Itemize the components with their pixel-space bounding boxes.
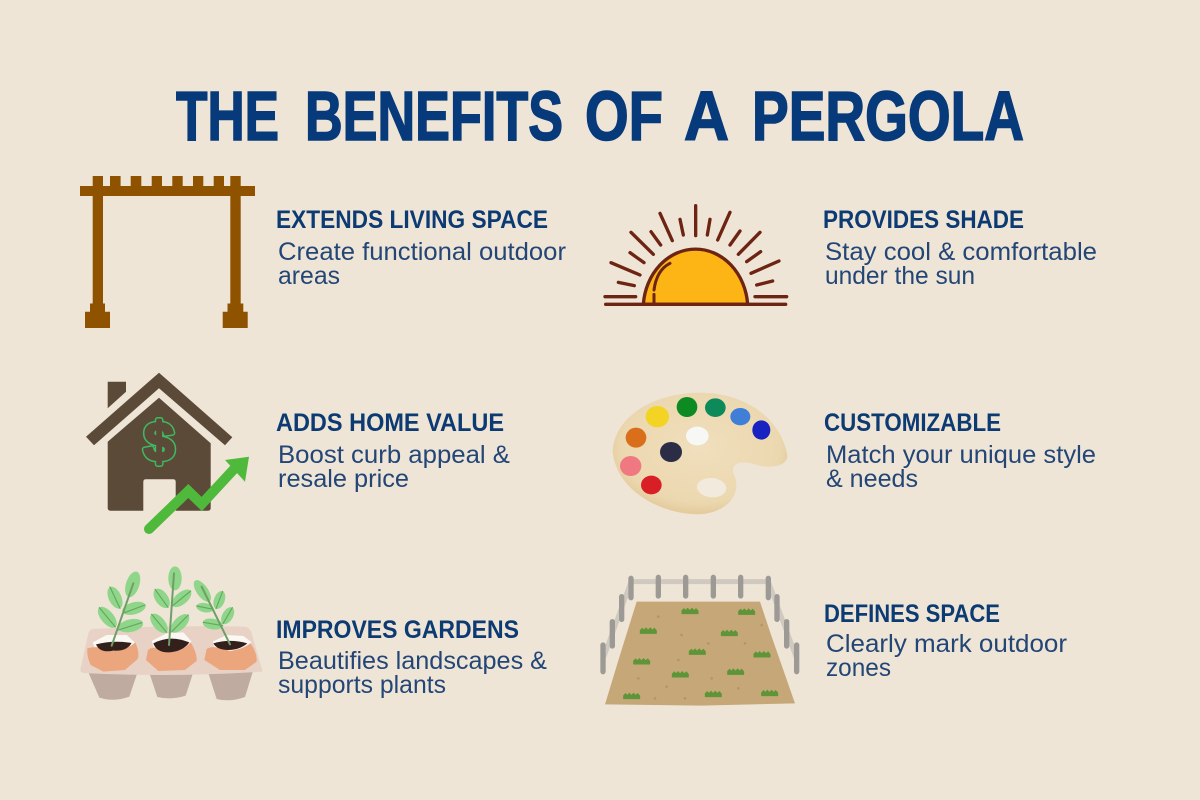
text block: customizable: CUSTOMIZABLE <box>824 409 1001 437</box>
text block: customizable: Match your unique style <box>826 441 1096 469</box>
text block: defines space: zones <box>826 654 891 682</box>
text block: provides shade <box>823 206 1097 290</box>
icon: paint palette <box>613 393 787 514</box>
text block: extends living space <box>276 206 566 290</box>
icon: fenced garden plot <box>603 577 797 706</box>
text block: adds home value <box>276 409 510 493</box>
title: THE <box>176 77 279 155</box>
icon: house with rising arrow: $ <box>144 412 174 472</box>
title <box>176 77 1024 155</box>
text block: defines space <box>824 600 1067 682</box>
icon: pergola <box>80 176 255 328</box>
text block: improves gardens: supports plants <box>278 671 446 699</box>
title: BENEFITS <box>305 77 563 155</box>
icon: seedlings in egg carton <box>80 566 263 700</box>
text block: provides shade: Stay cool & comfortable <box>825 238 1097 266</box>
text block: extends living space: areas <box>278 262 340 290</box>
icon: sun <box>605 206 787 304</box>
text block: customizable: & needs <box>826 465 918 493</box>
text block: defines space: Clearly mark outdoor <box>826 630 1067 658</box>
text block: extends living space: EXTENDS LIVING SPACE <box>276 206 548 234</box>
text block: improves gardens: IMPROVES GARDENS <box>276 616 519 644</box>
title: PERGOLA <box>752 77 1024 155</box>
text block: adds home value: resale price <box>278 465 409 493</box>
text block: provides shade: PROVIDES SHADE <box>823 206 1024 234</box>
text block: customizable <box>824 409 1096 493</box>
text block: improves gardens <box>276 616 547 699</box>
title: A <box>684 77 729 155</box>
text block: improves gardens: Beautifies landscapes & <box>278 647 547 675</box>
text block: extends living space: Create functional outdoor <box>278 238 566 266</box>
text block: adds home value: ADDS HOME VALUE <box>276 409 504 437</box>
title: OF <box>585 77 663 155</box>
text block: defines space: DEFINES SPACE <box>824 600 1000 628</box>
text block: adds home value: Boost curb appeal & <box>278 441 510 469</box>
text block: provides shade: under the sun <box>825 262 975 290</box>
icon: house with rising arrow: $ <box>144 412 174 472</box>
icon: house with rising arrow <box>86 373 249 529</box>
